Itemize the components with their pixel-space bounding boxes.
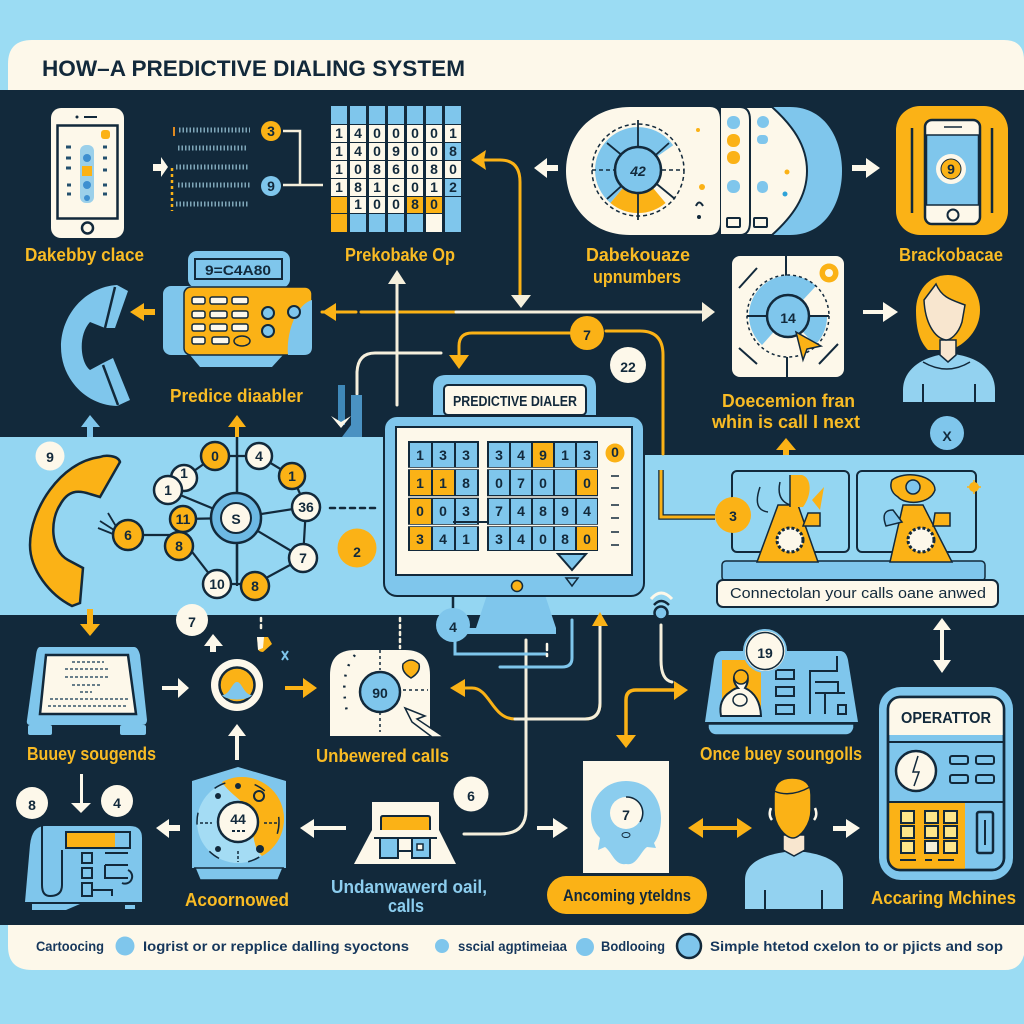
number grid: 0 [392, 196, 400, 212]
badge X [930, 416, 964, 450]
arrow left to handset [130, 303, 155, 321]
badge 4 [101, 785, 133, 817]
icon: printer [354, 802, 456, 864]
icon: predictive dialer monitor: 7 [517, 475, 525, 491]
number grid: 8 [449, 143, 457, 159]
badge 6: 6 [467, 788, 475, 804]
label: decision [711, 391, 860, 432]
icon: predictive dialer monitor: 4 [517, 503, 525, 519]
number grid [331, 106, 461, 232]
number grid: 8 [430, 161, 438, 177]
badge 22: 22 [620, 359, 636, 375]
caption: connection [717, 580, 998, 607]
icon: smartphone [51, 108, 124, 238]
number grid: 0 [411, 143, 419, 159]
badge 7 on connector [570, 316, 604, 350]
icon: predictive dialer monitor: 1 [561, 447, 569, 463]
number badges with bracket [261, 121, 323, 196]
icon: predictive dialer monitor: 0 [583, 475, 591, 491]
number badges with bracket: 3 [267, 123, 275, 139]
badge 7 on connector: 7 [583, 327, 591, 343]
badge 8 [16, 787, 48, 819]
number grid: 0 [411, 161, 419, 177]
icon: yellow phone tile [896, 106, 1008, 235]
arrowheads [322, 150, 715, 748]
network diagram: 7 [299, 550, 307, 566]
icon: predictive dialer monitor: 3 [495, 531, 503, 547]
connector arrows [237, 160, 715, 834]
icon: predictive dialer monitor: 0 [416, 503, 424, 519]
label: unanswered calls: Unbewered calls [316, 746, 449, 766]
icon: predictive dialer monitor: 9 [561, 503, 569, 519]
badge 7: 7 [188, 614, 196, 630]
icon: predictive dialer monitor: 1 [416, 475, 424, 491]
legend: Simple htetod cxelon to or pjicts and sop [710, 938, 1003, 954]
icon: predictive dialer monitor: 4 [517, 447, 525, 463]
number grid: 0 [373, 125, 381, 141]
label: answering machines: Accaring Mchines [871, 888, 1016, 908]
number badges with bracket: 9 [267, 178, 275, 194]
icon: console with badge 19 [705, 630, 858, 735]
network diagram: 0 [211, 448, 219, 464]
icon: wifi signal [651, 593, 672, 620]
icon: yellow phone tile: 9 [947, 161, 955, 177]
icon: predictive dialer monitor: 0 [539, 531, 547, 547]
arrow down yellow [80, 609, 100, 636]
icon: operator device: OPERATTOR [901, 710, 991, 727]
network diagram: 36 [298, 499, 314, 515]
icon: predictive dialer monitor: 0 [539, 475, 547, 491]
icon: decision card: 14 [780, 310, 796, 326]
number grid: 0 [449, 161, 457, 177]
small up arrow yellow [228, 415, 246, 437]
label: busy signals: Buuey sougends [27, 744, 156, 764]
number grid: 1 [354, 196, 362, 212]
legend: Bodlooing [601, 938, 665, 954]
icon: predictive dialer monitor: 4 [583, 503, 591, 519]
number grid: 1 [335, 143, 343, 159]
icon: database dial wheel [566, 107, 842, 235]
icon: dial handset [61, 285, 130, 406]
badge 2 [338, 528, 376, 568]
pill: incoming yields [547, 876, 707, 914]
icon: rotary phones panel [715, 471, 985, 581]
number grid: 6 [392, 161, 400, 177]
icon: predictive dialer monitor: 4 [517, 531, 525, 547]
badge 22 [610, 347, 646, 383]
number grid: 2 [449, 179, 457, 195]
network diagram: S [231, 511, 241, 527]
label: undone calls: Undanwawerd oail, [331, 877, 487, 897]
icon: predictive dialer monitor: 1 [416, 447, 424, 463]
badge 9 [36, 442, 64, 470]
number grid: 1 [335, 161, 343, 177]
number grid: 8 [411, 196, 419, 212]
badge 2: 2 [353, 544, 361, 560]
icon: predictive dialer monitor: 0 [495, 475, 503, 491]
network diagram: 1 [164, 482, 172, 498]
arrow right orange [285, 678, 317, 698]
label: acoornowed: Acoornowed [185, 890, 289, 910]
badge X: X [942, 428, 952, 444]
list of numbers [172, 127, 250, 211]
arrow left long [300, 819, 346, 838]
icon: predictive dialer monitor: 0 [583, 531, 591, 547]
icon: predictive dialer monitor: PREDICTIVE DIALER [453, 394, 577, 410]
arrow up [228, 724, 246, 760]
number grid: 1 [335, 125, 343, 141]
number grid: 0 [411, 125, 419, 141]
label: decision: whin is call I next [711, 412, 860, 432]
pill: incoming yields: Ancoming yteldns [563, 886, 691, 905]
double arrow [688, 818, 752, 838]
number grid: 0 [373, 196, 381, 212]
number grid: 0 [373, 143, 381, 159]
network diagram: 10 [209, 576, 225, 592]
icon: predictive dialer monitor: 7 [495, 503, 503, 519]
double arrow vertical [933, 618, 951, 673]
legend [36, 934, 1003, 958]
icon: predictive dialer monitor: 9 [539, 447, 547, 463]
header panel [8, 40, 1024, 90]
arrow right to woman [863, 302, 898, 322]
label: precise op: Prekobake Op [345, 245, 455, 265]
icon: call disc [211, 659, 263, 711]
legend: sscial agptimeiaa [458, 938, 567, 954]
badge 8: 8 [28, 797, 36, 813]
badge 4: 4 [113, 795, 121, 811]
icon: predictive dialer device [163, 251, 312, 367]
icon: predictive dialer device: 9=C4A80 [205, 262, 271, 278]
icon: unanswered card: 90 [372, 685, 388, 701]
number grid: 0 [354, 161, 362, 177]
title: HOW–A PREDICTIVE DIALING SYSTEM [42, 56, 465, 81]
icon: man agent [745, 778, 843, 909]
number grid: 8 [373, 161, 381, 177]
icon: database dial wheel: 42 [629, 163, 646, 179]
icon: predictive dialer monitor: 8 [462, 475, 470, 491]
icon: predictive dialer monitor: 8 [561, 531, 569, 547]
badge 7 [176, 604, 208, 636]
number grid: 8 [354, 179, 362, 195]
arrow right [162, 678, 189, 698]
number grid: 4 [354, 143, 362, 159]
icon: decision card [732, 256, 844, 377]
arrow down [71, 774, 91, 813]
arrow right [537, 818, 568, 838]
number grid: 9 [392, 143, 400, 159]
legend: Iogrist or or repplice dalling syoctons [143, 938, 409, 954]
icon: predictive dialer monitor: 3 [416, 531, 424, 547]
arrow right to phone [852, 158, 880, 178]
icon: operator device [879, 687, 1013, 880]
icon: console with badge 19: 19 [757, 645, 773, 661]
number grid: 1 [335, 179, 343, 195]
icon: predictive dialer monitor: 1 [439, 475, 447, 491]
icon: rotary dial unit [192, 767, 286, 880]
network diagram: 1 [180, 465, 188, 481]
icon: predictive dialer monitor: 0 [439, 503, 447, 519]
network diagram: 11 [176, 511, 191, 527]
small icon: spark [257, 637, 288, 660]
icon: predictive dialer monitor [384, 375, 644, 634]
icon: desk phone [25, 826, 142, 910]
label: once busy signals: Once buey soungolls [700, 744, 862, 764]
up arrow yellow [776, 438, 796, 455]
light blue band right [645, 455, 1024, 615]
icon: rotary phones panel: 3 [729, 508, 737, 524]
network diagram: 6 [124, 527, 132, 543]
number grid: 1 [373, 179, 381, 195]
number grid: 0 [430, 143, 438, 159]
icon: predictive dialer monitor: 3 [462, 503, 470, 519]
network diagram: 4 [255, 448, 263, 464]
arrow left to dial wheel [534, 158, 558, 178]
legend: Cartoocing [36, 938, 104, 954]
label: undone calls [331, 877, 487, 916]
arrow [153, 157, 168, 177]
label: database numbers: Dabekouaze [586, 245, 690, 265]
network diagram: 8 [175, 538, 183, 554]
icon: unanswered card [330, 650, 444, 737]
icon: laptop script [27, 647, 147, 735]
number grid: 0 [392, 125, 400, 141]
small up arrow blue [81, 415, 100, 437]
icon: card with blob 7 [583, 761, 669, 873]
blue down connector [331, 385, 362, 437]
label: database place: Dakebby clace [25, 245, 144, 265]
number grid: 1 [449, 125, 457, 141]
icon: predictive dialer monitor: 0 [611, 444, 619, 460]
arrow left [156, 819, 180, 838]
footer panel [8, 925, 1024, 970]
badge 4 [436, 608, 470, 642]
icon: rotary dial unit: 44 [230, 811, 246, 827]
label: undone calls: calls [388, 896, 424, 916]
label: database numbers [586, 245, 690, 287]
network diagram: 1 [288, 468, 296, 484]
label: decision: Doecemion fran [722, 391, 855, 411]
number grid: 1 [430, 179, 438, 195]
icon: predictive dialer monitor: 4 [439, 531, 447, 547]
number grid: 4 [354, 125, 362, 141]
number grid: c [392, 179, 400, 195]
network diagram: 8 [251, 578, 259, 594]
badge 9: 9 [46, 449, 54, 465]
arrow up [204, 634, 223, 652]
icon: predictive dialer monitor: 8 [539, 503, 547, 519]
label: predictive dialer: Predice diaabler [170, 386, 303, 406]
number grid: 0 [430, 125, 438, 141]
icon: yellow handset [30, 456, 120, 606]
caption: connection: Connectolan your calls oane anwed [730, 585, 986, 602]
icon: predictive dialer monitor: 3 [583, 447, 591, 463]
light blue band left [0, 437, 645, 615]
icon: predictive dialer monitor: 3 [495, 447, 503, 463]
icon: predictive dialer monitor: 3 [439, 447, 447, 463]
label: database numbers: upnumbers [593, 267, 681, 287]
icon: card with blob 7: 7 [622, 807, 630, 823]
badge 4: 4 [449, 619, 457, 635]
label: brackobacae: Brackobacae [899, 245, 1003, 265]
icon: woman operator [903, 275, 995, 402]
number grid: 0 [411, 179, 419, 195]
network diagram [98, 442, 320, 600]
badge 6 [454, 776, 488, 812]
icon: predictive dialer monitor: 1 [462, 531, 470, 547]
arrow right [833, 819, 860, 838]
number grid: 0 [430, 196, 438, 212]
icon: predictive dialer monitor: 3 [462, 447, 470, 463]
